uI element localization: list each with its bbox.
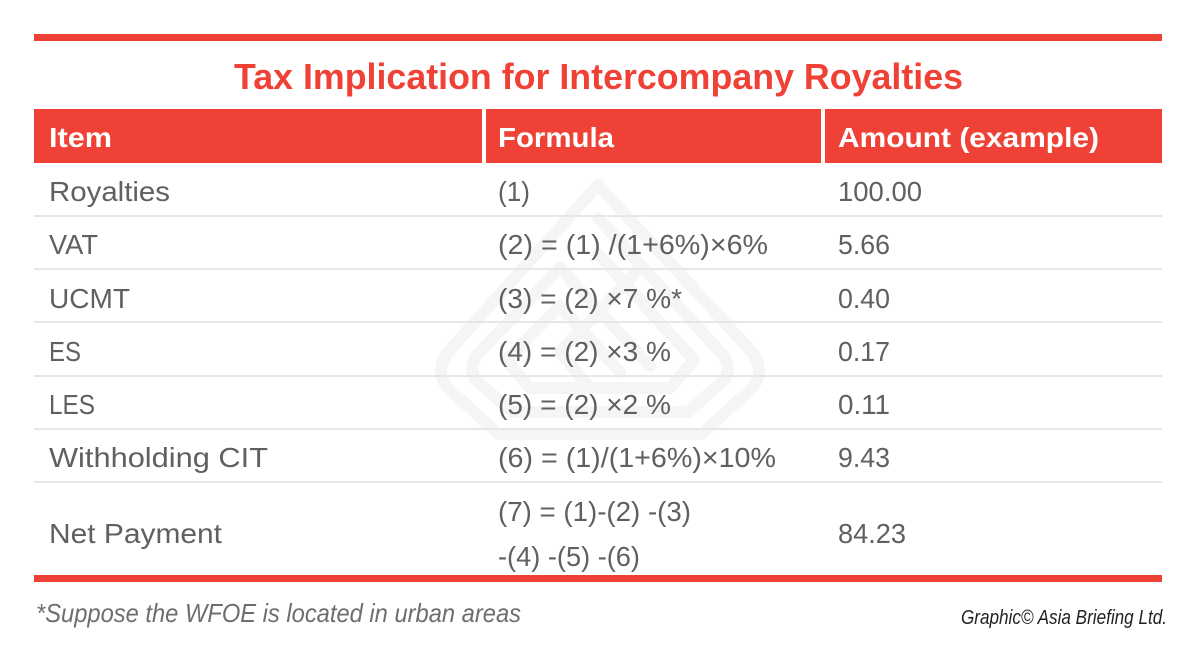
row: ES: 0.17 bbox=[838, 336, 890, 367]
row: ES: (4) = (2) ×3 % bbox=[498, 336, 671, 367]
row: UCMT: (3) = (2) ×7 %* bbox=[498, 283, 682, 314]
row: Withholding CIT: (6) = (1)/(1+6%)×10% bbox=[498, 442, 776, 473]
row: UCMT: 0.40 bbox=[838, 283, 890, 314]
row dividers bbox=[34, 215, 1162, 483]
row: LES: (5) = (2) ×2 % bbox=[498, 389, 671, 420]
table header: Item bbox=[49, 122, 112, 153]
table header bbox=[34, 109, 1162, 163]
row: Net Payment: 84.23 bbox=[838, 518, 906, 549]
row: Royalties: Royalties bbox=[49, 176, 170, 207]
row: VAT: (2) = (1) /(1+6%)×6% bbox=[498, 229, 768, 260]
row: VAT: 5.66 bbox=[838, 229, 890, 260]
row: Royalties: 100.00 bbox=[838, 176, 922, 207]
row: Withholding CIT bbox=[49, 442, 890, 473]
row: UCMT: UCMT bbox=[49, 283, 130, 314]
credit: Graphic© Asia Briefing Ltd. bbox=[961, 607, 1167, 629]
bottom rule bbox=[34, 575, 1162, 582]
table header: Amount (example) bbox=[838, 122, 1099, 153]
row: LES bbox=[49, 389, 890, 420]
watermark logo bbox=[441, 185, 759, 434]
row: UCMT bbox=[49, 283, 890, 314]
row: Royalties bbox=[49, 176, 922, 207]
row: ES bbox=[49, 336, 890, 367]
row: Royalties: (1) bbox=[498, 176, 530, 207]
row: VAT: VAT bbox=[49, 229, 98, 260]
title: Tax Implication for Intercompany Royalties bbox=[234, 56, 963, 97]
footnote: *Suppose the WFOE is located in urban areas bbox=[36, 598, 521, 628]
table header: Formula bbox=[498, 122, 614, 153]
row: LES: 0.11 bbox=[838, 389, 890, 420]
row: Net Payment: -(4) -(5) -(6) bbox=[498, 541, 640, 572]
row: Net Payment bbox=[49, 496, 906, 572]
row: Net Payment: Net Payment bbox=[49, 518, 222, 549]
row: ES: ES bbox=[49, 336, 81, 367]
top rule bbox=[34, 34, 1162, 41]
row: VAT bbox=[49, 229, 890, 260]
row: Withholding CIT: 9.43 bbox=[838, 442, 890, 473]
row: Withholding CIT: Withholding CIT bbox=[49, 442, 268, 473]
row: Net Payment: (7) = (1)-(2) -(3) bbox=[498, 496, 691, 527]
row: LES: LES bbox=[49, 389, 95, 420]
